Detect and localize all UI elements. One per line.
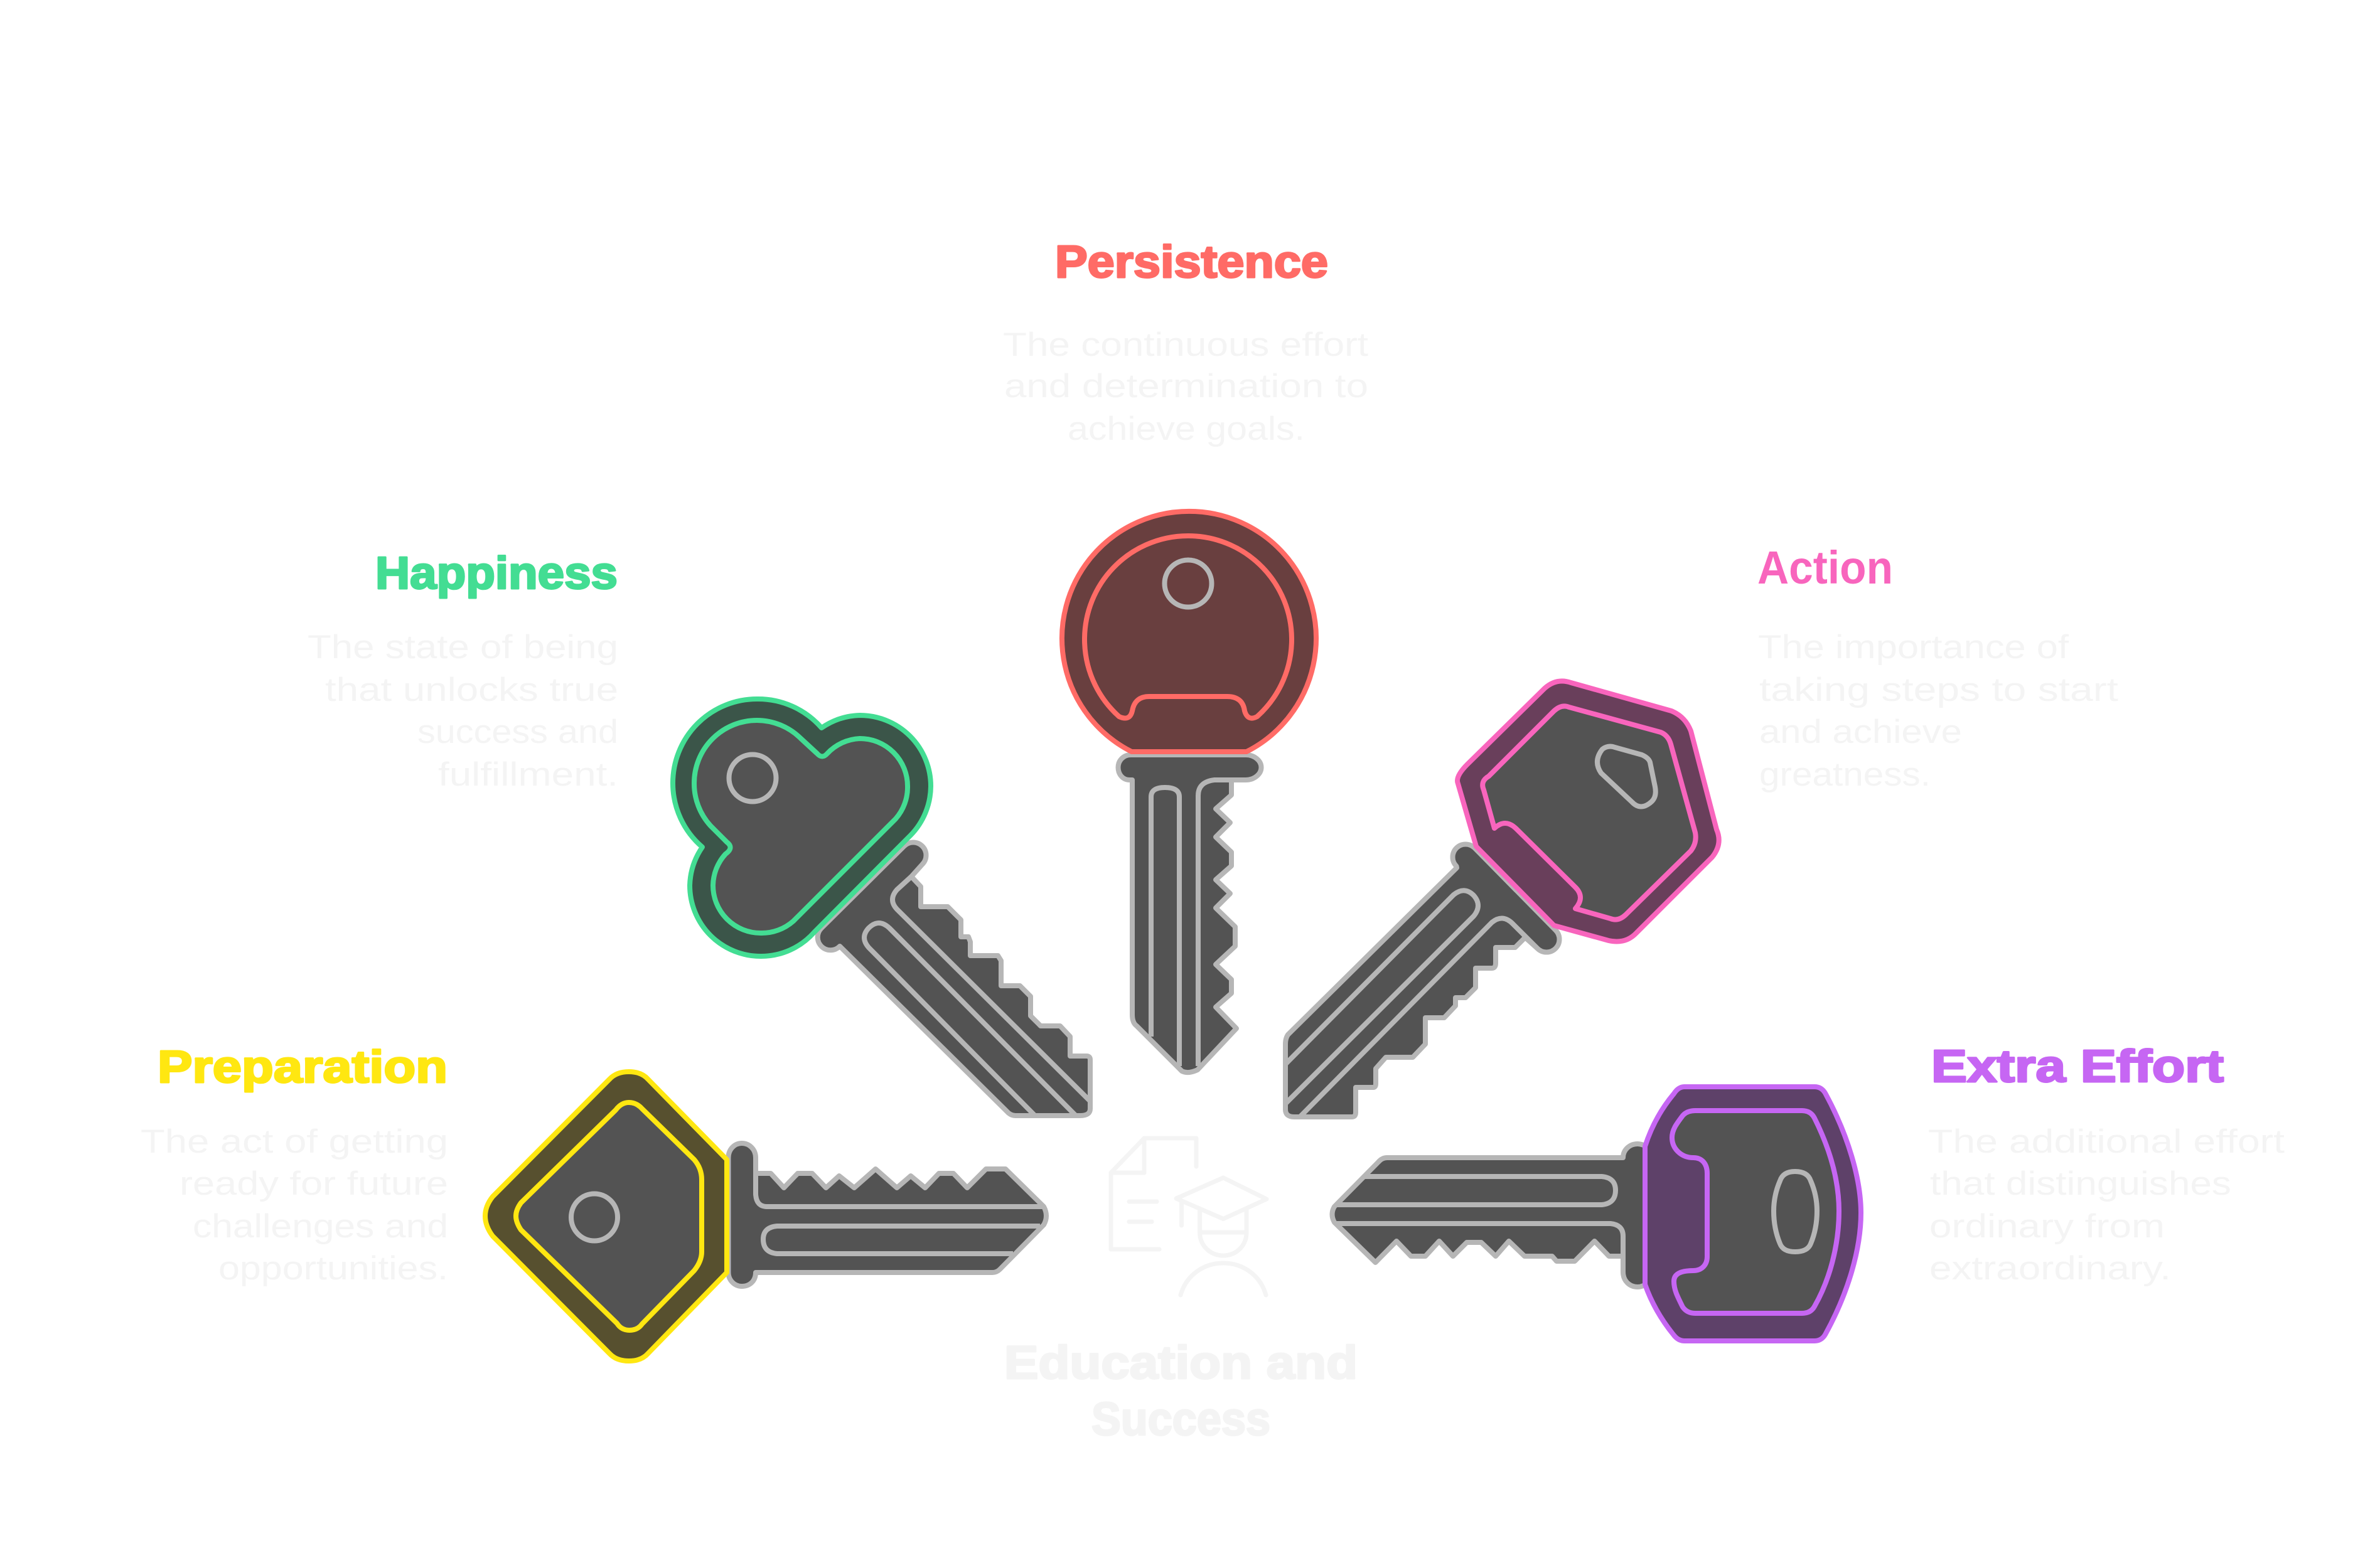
key hole (1774, 1171, 1817, 1252)
icon: purple key (1332, 1087, 1861, 1341)
key hole (571, 1193, 618, 1241)
key hole (1597, 747, 1656, 807)
key blade and shoulder (1285, 844, 1560, 1117)
key blade and shoulder (818, 842, 1090, 1116)
panel: Extra Effort (1332, 1042, 2285, 1341)
key head inner outline (694, 720, 908, 933)
description: Action: greatness. (1759, 756, 1931, 793)
icon: document and graduate (1111, 1138, 1267, 1295)
description: Preparation: challenges and (193, 1208, 448, 1245)
panel: Happiness (308, 548, 1090, 1116)
key head (1645, 1087, 1861, 1341)
key head (673, 699, 931, 956)
icon: pink key (1285, 681, 1719, 1117)
description: Preparation: opportunities. (218, 1250, 448, 1287)
icon: red key (1062, 511, 1316, 1072)
description: Extra Effort: ordinary from (1929, 1208, 2165, 1245)
panel: central topic (1004, 1138, 1358, 1445)
key head (485, 1072, 727, 1361)
description: Preparation: The act of getting (141, 1123, 448, 1160)
description: Extra Effort: The additional effort (1928, 1123, 2285, 1160)
blade grooves (756, 1173, 1044, 1254)
title: Education and Success: Success (1091, 1393, 1270, 1445)
description: Happiness (308, 629, 618, 793)
key blade and shoulder (1332, 1144, 1652, 1287)
description: Action (1758, 629, 2118, 793)
key hole (1165, 560, 1211, 607)
key head (1457, 681, 1719, 941)
description: Preparation (141, 1123, 448, 1287)
title: Education and Success: Education and (1004, 1337, 1358, 1389)
panel: Preparation (141, 1042, 1046, 1361)
key hole (729, 754, 776, 802)
key head (1062, 511, 1316, 752)
blade grooves (864, 877, 1090, 1116)
blade grooves (1337, 1177, 1623, 1272)
heading: Persistence: Persistence (1055, 237, 1328, 287)
description: Happiness: that unlocks true (325, 671, 618, 708)
heading: Preparation: Preparation (158, 1042, 448, 1092)
description: Preparation: ready for future (180, 1165, 448, 1202)
key blade and shoulder (1118, 755, 1262, 1072)
description: Extra Effort (1928, 1123, 2285, 1287)
title: Education and Success (1004, 1337, 1358, 1445)
panel: Persistence (1003, 237, 1368, 1072)
description: Happiness: fulfillment. (438, 756, 618, 793)
panel: Action (1285, 542, 2118, 1117)
description: Persistence: achieve goals. (1068, 410, 1305, 447)
key head inner outline (1085, 536, 1292, 718)
blade grooves (1151, 780, 1231, 1066)
description: Extra Effort: extraordinary. (1929, 1250, 2171, 1287)
description: Persistence: The continuous effort (1003, 326, 1368, 363)
heading: Happiness: Happiness (375, 548, 618, 599)
heading: Extra Effort: Extra Effort (1931, 1042, 2224, 1092)
description: Action: The importance of (1758, 629, 2069, 666)
description: Action: and achieve (1759, 713, 1962, 750)
blade grooves (1286, 890, 1538, 1117)
key head inner outline (516, 1102, 702, 1330)
icon: yellow key (485, 1072, 1046, 1361)
icon: green key (673, 699, 1090, 1116)
description: Extra Effort: that distinguishes (1930, 1165, 2231, 1202)
description: Persistence: and determination to (1004, 368, 1368, 405)
key blade and shoulder (728, 1143, 1046, 1286)
description: Happiness: success and (417, 713, 618, 750)
heading: Action: Action (1757, 542, 1893, 594)
description: Action: taking steps to start (1759, 671, 2118, 708)
description: Persistence (1003, 326, 1368, 447)
description: Happiness: The state of being (308, 629, 618, 666)
key head inner outline (1482, 706, 1696, 920)
key head inner outline (1672, 1111, 1839, 1313)
